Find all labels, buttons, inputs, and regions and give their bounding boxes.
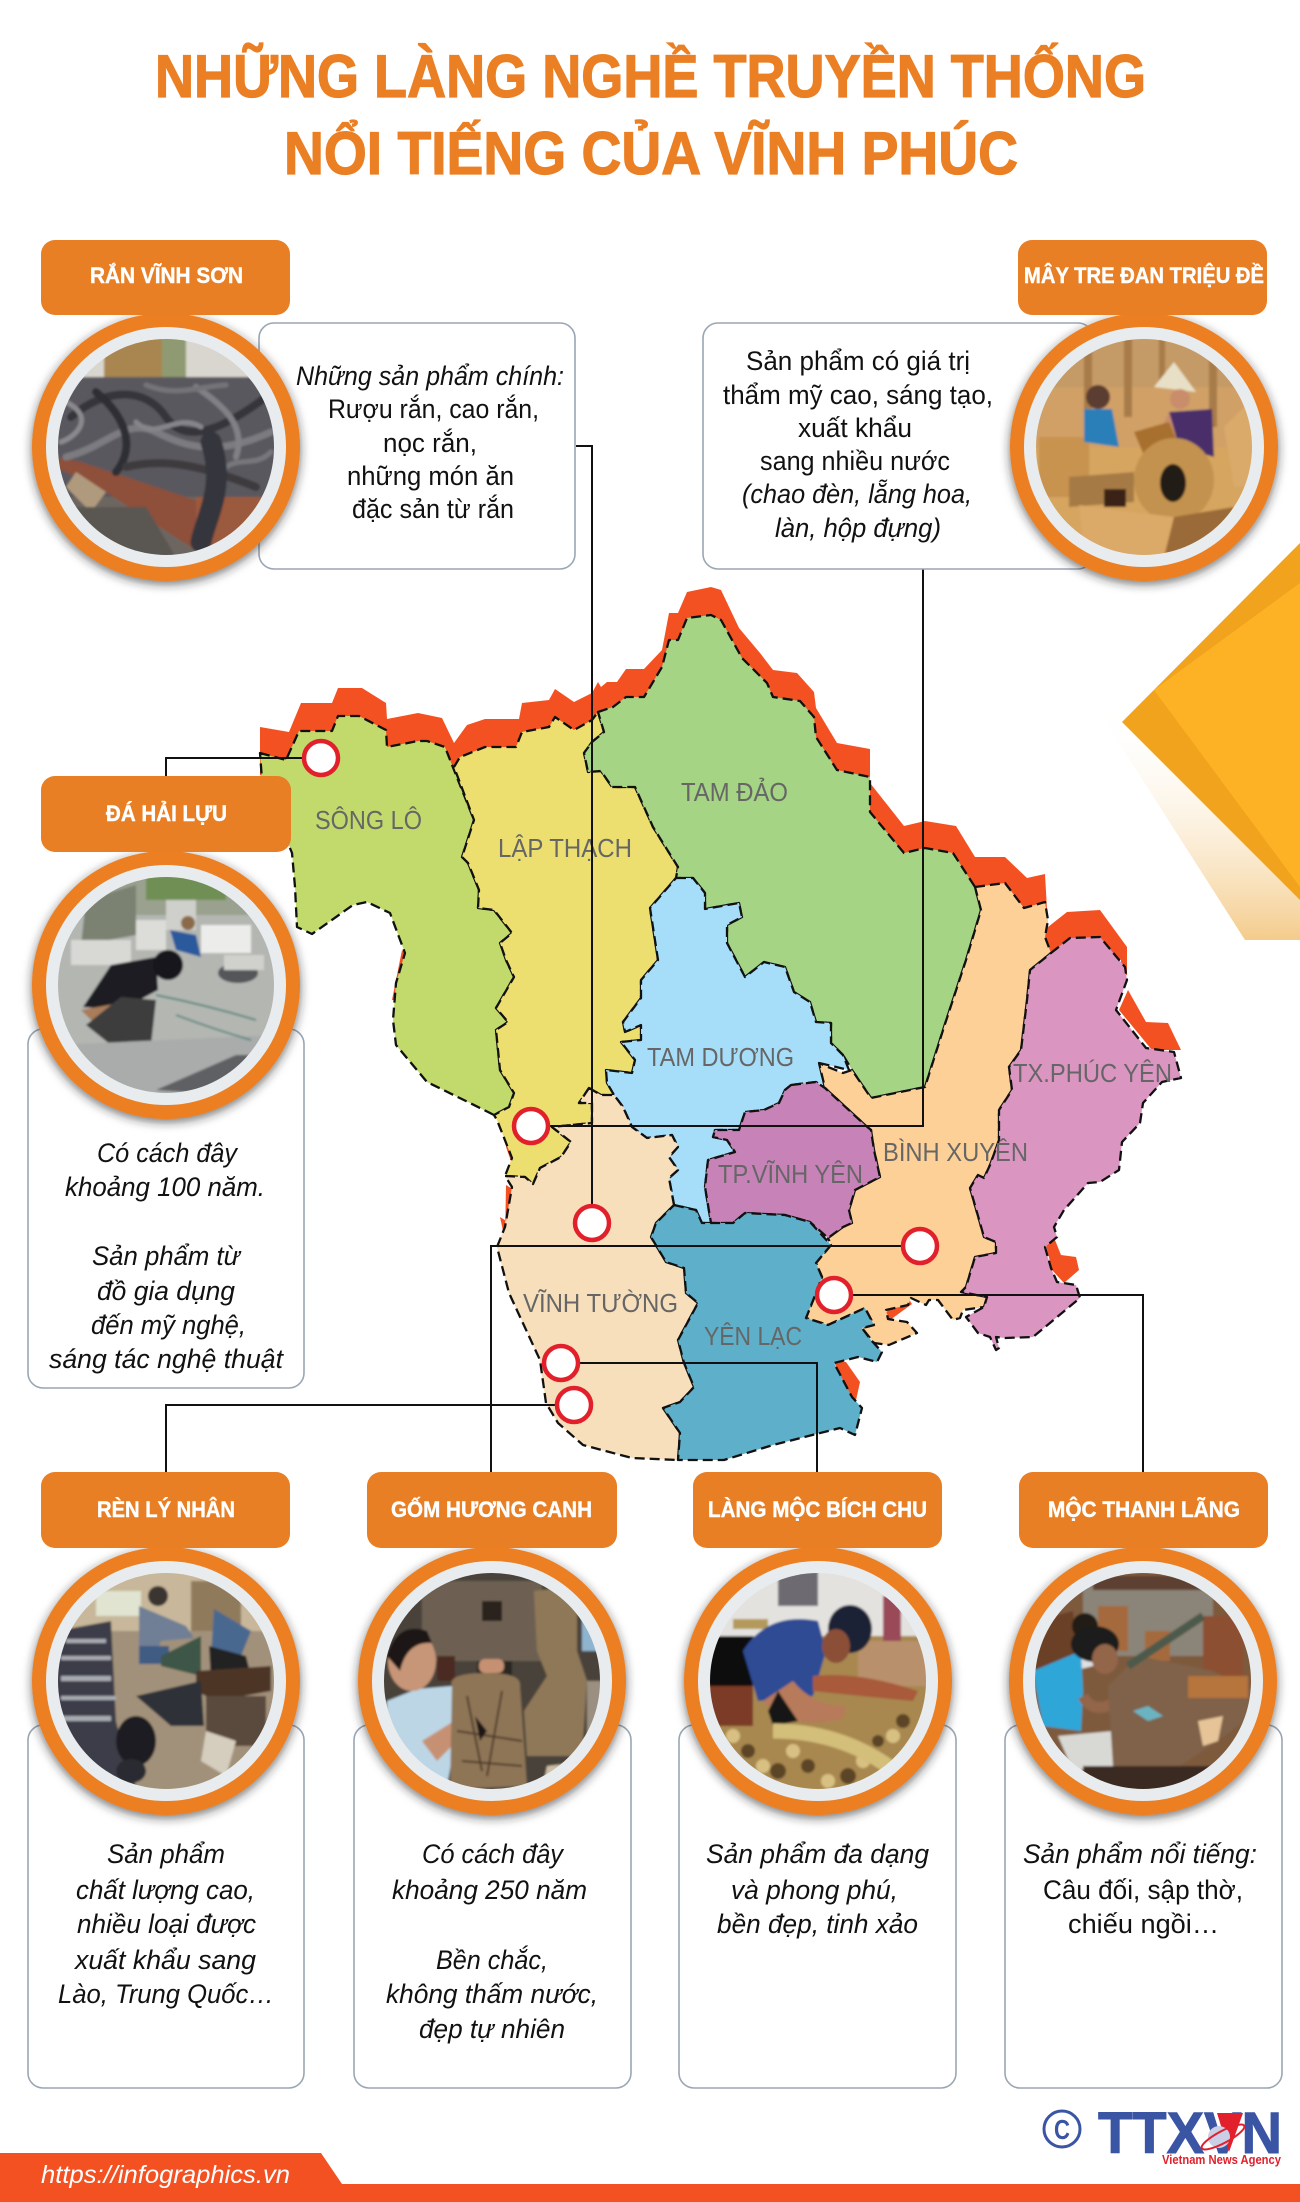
text box: Da Hai Luu: đến mỹ nghệ, (91, 1310, 246, 1340)
map district names: TAM ĐẢO (681, 777, 788, 807)
map district names: TAM DƯƠNG (647, 1042, 794, 1072)
map district names: TP.VĨNH YÊN (718, 1159, 863, 1189)
text box: Da Hai Luu (28, 1029, 304, 1388)
text box: Ren Ly Nhan: nhiều loại được (77, 1909, 256, 1939)
title: NỔI TIẾNG CỦA VĨNH PHÚC (284, 120, 1018, 187)
label: Thanh Lang (1019, 1472, 1268, 1548)
label: Bich Chu (693, 1472, 942, 1548)
text box: Ren Ly Nhan: Sản phẩm (107, 1839, 225, 1869)
title (155, 43, 1146, 187)
text box: May tre: Sản phẩm có giá trị (746, 346, 970, 376)
region: Lap Thach (454, 712, 678, 1184)
panel: Ran Vinh Son (32, 240, 575, 581)
footer logo: TTXVN: TTXVN (1098, 2101, 1282, 2166)
text box: Ran Vinh Son: những món ăn (347, 461, 514, 491)
photo circle: bamboo weaving (1010, 313, 1278, 581)
text box: Gom Huong Canh: Bền chắc, (436, 1944, 548, 1975)
label: Thanh Lang: MỘC THANH LÃNG (1048, 1497, 1240, 1522)
map district names: BÌNH XUYÊN (883, 1137, 1028, 1167)
footer bar: https://infographics.vn (41, 2161, 290, 2189)
label: Gom Huong Canh: GỐM HƯƠNG CANH (391, 1496, 592, 1522)
region: Tam Dao (584, 615, 981, 1098)
region: Song Lo (260, 716, 514, 1115)
label: Ren Ly Nhan: RÈN LÝ NHÂN (97, 1497, 235, 1522)
text box: May tre: (chao đèn, lẵng hoa, (742, 479, 972, 509)
text box: Thanh Lang: Câu đối, sập thờ, (1043, 1875, 1243, 1905)
panel: Ren Ly Nhan (28, 1472, 304, 2088)
region: Yen Lac (651, 1205, 882, 1460)
region: Phuc Yen (961, 937, 1181, 1350)
footer logo: TTXVN: C (1054, 2114, 1070, 2145)
text box: Bich Chu (679, 1725, 956, 2088)
text box: Ren Ly Nhan: xuất khẩu sang (73, 1945, 256, 1975)
label: May tre: MÂY TRE ĐAN TRIỆU ĐỀ (1024, 263, 1264, 288)
photo circle: wood carver (684, 1547, 952, 1815)
photo circle: stone carving (32, 851, 300, 1119)
photo circle: blacksmith (32, 1547, 300, 1815)
text box: Gom Huong Canh: Có cách đây (422, 1839, 564, 1869)
label: Bich Chu: LÀNG MỘC BÍCH CHU (708, 1497, 927, 1522)
text box: Ran Vinh Son: Rượu rắn, cao rắn, (328, 393, 539, 424)
text box: Gom Huong Canh: khoảng 250 năm (392, 1875, 587, 1905)
text box: Ren Ly Nhan (28, 1725, 304, 2088)
map district names: TX.PHÚC YÊN (1013, 1058, 1172, 1088)
text box: Bich Chu: và phong phú, (731, 1875, 898, 1905)
text box: Ran Vinh Son: Những sản phẩm chính: (296, 361, 564, 391)
title: NHỮNG LÀNG NGHỀ TRUYỀN THỐNG (155, 43, 1146, 110)
text box: Da Hai Luu: Sản phẩm từ (92, 1241, 242, 1271)
text box: May tre: xuất khẩu (798, 413, 912, 443)
text box: Ran Vinh Son (259, 323, 575, 569)
map pins (304, 741, 937, 1422)
text box: Da Hai Luu: khoảng 100 năm. (65, 1172, 265, 1202)
text box: Da Hai Luu: đồ gia dụng (97, 1276, 235, 1306)
map district names: LẬP THẠCH (498, 833, 632, 863)
panel: Gom Huong Canh (354, 1472, 631, 2088)
photo circle: wood furniture workshop (1009, 1547, 1277, 1815)
connector lines from villages to map pins (166, 446, 1143, 1474)
label: Ran Vinh Son: RẮN VĨNH SƠN (90, 263, 243, 288)
map district names: SÔNG LÔ (315, 805, 422, 835)
label: Ren Ly Nhan (41, 1472, 290, 1548)
text box: May tre: sang nhiều nước (760, 446, 950, 476)
footer logo: TTXVN: Vietnam News Agency (1162, 2153, 1281, 2167)
text box: Ran Vinh Son: nọc rắn, (383, 427, 477, 458)
photo circle: snakes (32, 313, 300, 581)
text box: May tre: thẩm mỹ cao, sáng tạo, (723, 380, 993, 410)
text box: Thanh Lang (1005, 1725, 1282, 2088)
region: Vinh Tuong (497, 1088, 698, 1460)
region: TP Vinh Yen (705, 1082, 880, 1238)
text box: Gom Huong Canh: đẹp tự nhiên (419, 2014, 565, 2044)
text box: Ran Vinh Son: đặc sản từ rắn (352, 493, 514, 524)
map district names (315, 777, 1172, 1351)
text box: May tre: làn, hộp đựng) (775, 513, 941, 543)
text box: Gom Huong Canh (354, 1725, 631, 2088)
region: Binh Xuyen (806, 883, 1051, 1345)
map red edge shadow (260, 587, 1181, 1405)
label: May tre (1018, 240, 1267, 315)
text box: Bich Chu: bền đẹp, tinh xảo (717, 1909, 918, 1939)
text box: Ren Ly Nhan: Lào, Trung Quốc… (58, 1979, 274, 2009)
label: Da Hai Luu: ĐÁ HẢI LỰU (106, 801, 227, 826)
text box: Da Hai Luu: Có cách đây (97, 1138, 238, 1168)
map of Vinh Phuc (260, 587, 1181, 1460)
map district names: VĨNH TƯỜNG (523, 1288, 678, 1318)
map district names: YÊN LẠC (704, 1321, 802, 1351)
panel: Da Hai Luu (28, 776, 304, 1388)
label: Gom Huong Canh (367, 1472, 617, 1548)
panel: Moc Thanh Lang (1005, 1472, 1282, 2088)
text box: Bich Chu: Sản phẩm đa dạng (706, 1839, 929, 1869)
panel: May tre dan Trieu De (703, 240, 1278, 581)
text box: Ren Ly Nhan: chất lượng cao, (76, 1875, 255, 1905)
text box: Gom Huong Canh: không thấm nước, (386, 1979, 598, 2009)
text box: May tre (703, 323, 1093, 569)
label: Da Hai Luu (41, 776, 291, 852)
text box: Thanh Lang: Sản phẩm nổi tiếng: (1023, 1839, 1257, 1869)
photo circle: pottery (358, 1547, 626, 1815)
text box: Thanh Lang: chiếu ngồi… (1068, 1909, 1219, 1939)
label: Ran Vinh Son (41, 240, 290, 315)
panel: Lang Moc Bich Chu (679, 1472, 956, 2088)
decorative corner: orange triangles (1103, 543, 1300, 940)
footer bar (0, 2153, 1300, 2202)
text box: Da Hai Luu: sáng tác nghệ thuật (49, 1344, 284, 1374)
region: Tam Duong (606, 878, 849, 1223)
